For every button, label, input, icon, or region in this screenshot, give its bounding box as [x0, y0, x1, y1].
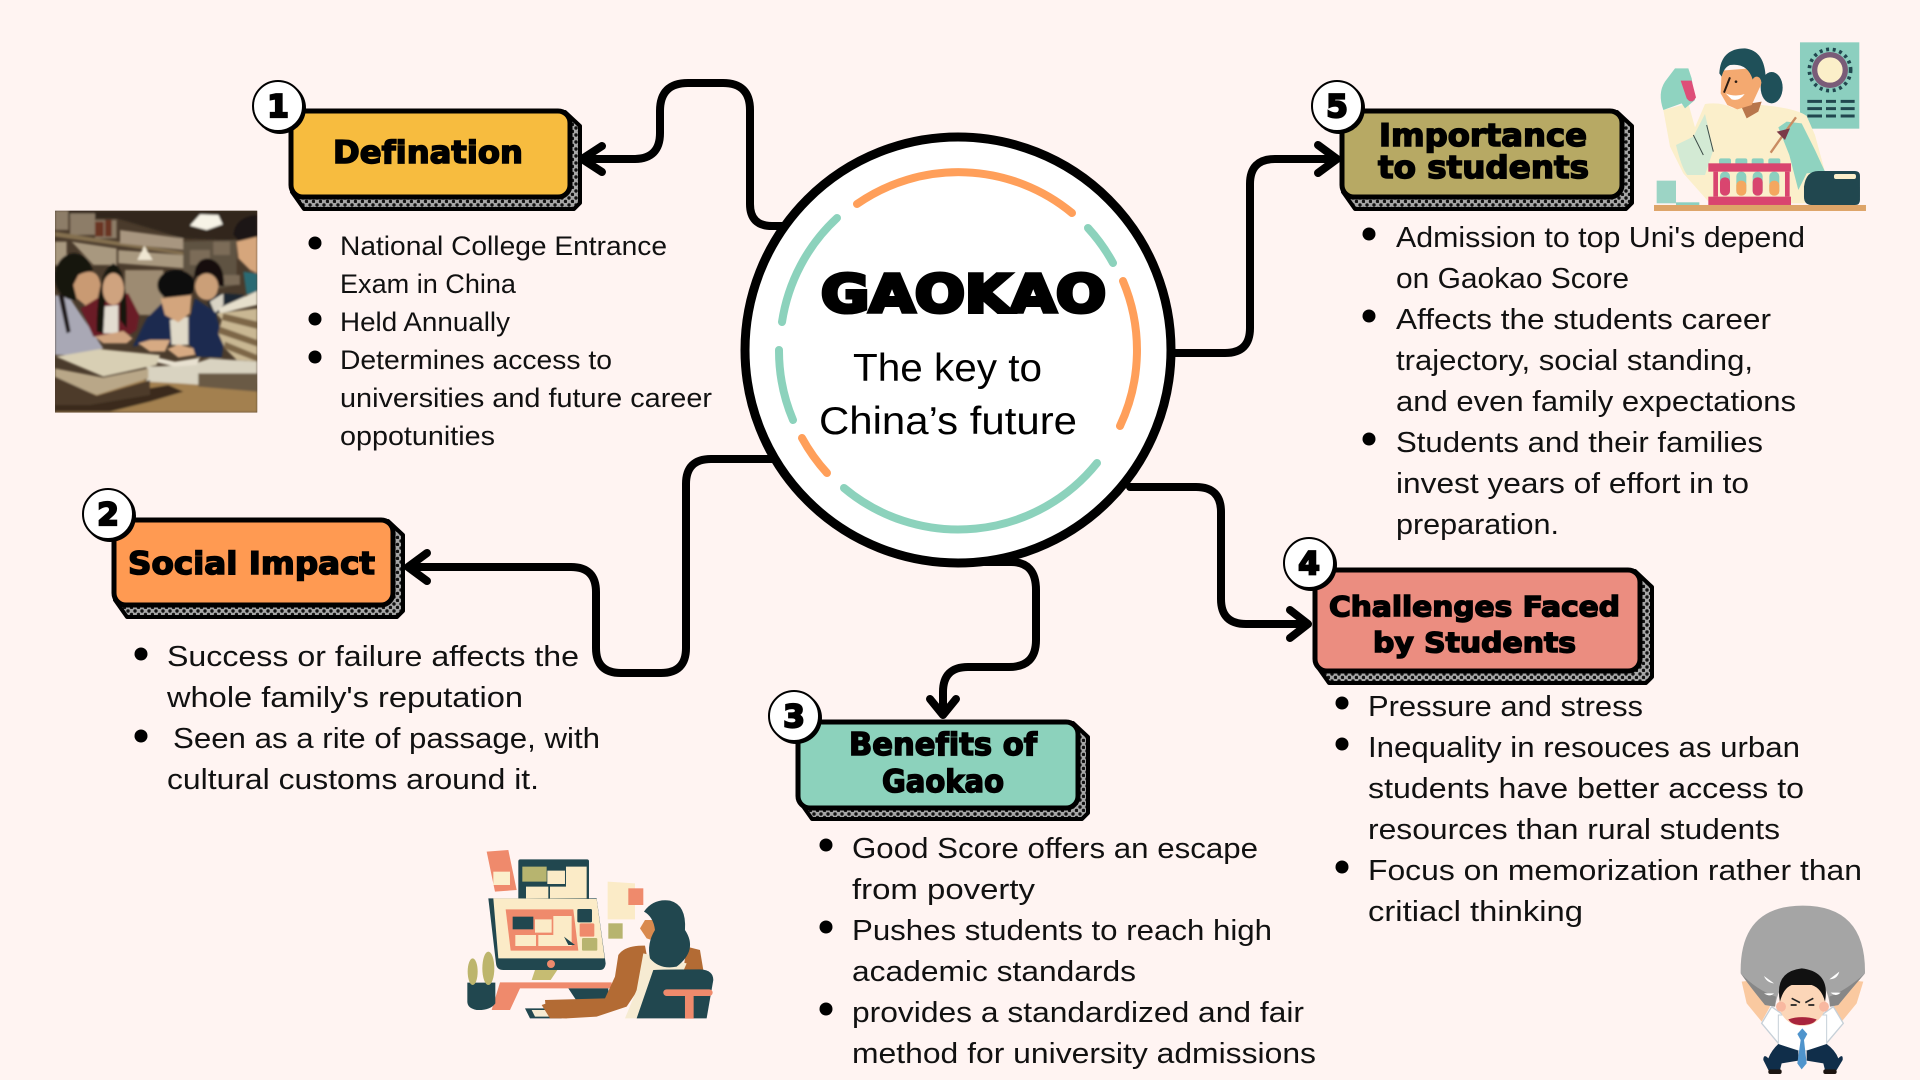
panel: Social Impact — [83, 489, 600, 796]
text: importance bullets — [1362, 222, 1805, 541]
text: challenges bullets: Inequality in resouces as urban — [1368, 732, 1800, 764]
panel: Benefits of Gaokao — [769, 691, 1316, 1070]
text: challenges bullets: students have better access to — [1368, 773, 1804, 805]
test tube rack — [1708, 158, 1791, 205]
connector: centre to Defination — [582, 83, 782, 226]
right student — [207, 293, 245, 317]
head — [1741, 102, 1762, 118]
icon: woman at computer — [467, 850, 713, 1019]
text: definition bullets: National College Entrance — [340, 231, 667, 261]
text: importance bullets: on Gaokao Score — [1396, 263, 1629, 295]
number badge 1: 1 — [267, 89, 289, 125]
text: importance bullets: invest years of effort in to — [1396, 468, 1749, 500]
text: importance bullets: preparation. — [1396, 509, 1559, 541]
lab table and objects — [1654, 205, 1866, 211]
text: importance bullets: Affects the students career — [1396, 304, 1771, 336]
heading box: Importance: Importance — [1379, 118, 1587, 154]
text: benefits bullets — [820, 833, 1316, 1070]
text: definition bullets: Held Annually — [340, 307, 511, 337]
text: challenges bullets — [1336, 691, 1862, 928]
number badge 2: 2 — [97, 497, 119, 533]
text: social impact bullets — [134, 641, 600, 796]
second student — [81, 293, 139, 337]
connector: centre to Benefits — [930, 562, 1036, 715]
number badge 2 — [83, 489, 136, 542]
panel: Importance to students — [1312, 81, 1805, 541]
decorative ring arcs — [779, 172, 1137, 530]
text: challenges bullets: Focus on memorization rather than — [1368, 855, 1862, 887]
number badge 5: 5 — [1326, 89, 1348, 125]
text: challenges bullets: critiacl thinking — [1368, 896, 1583, 928]
text: social impact bullets: cultural customs around it. — [167, 764, 539, 796]
heading box: Defination: Defination — [333, 135, 523, 171]
table and papers — [55, 380, 257, 413]
text: benefits bullets: academic standards — [852, 956, 1136, 988]
right glove and sleeve — [1778, 122, 1825, 190]
icon: scientist with test tubes — [1654, 42, 1866, 211]
connector: centre to Importance — [1172, 145, 1337, 353]
icon: man lifting a boulder — [1741, 906, 1865, 1074]
number badge 1 — [253, 81, 306, 134]
heading box: Importance: to students — [1378, 150, 1589, 186]
heading box: Challenges — [1315, 570, 1652, 683]
text: importance bullets: Students and their families — [1396, 427, 1763, 459]
number badge 4 — [1284, 538, 1337, 591]
panel: Challenges Faced by Students — [1284, 538, 1862, 928]
heading box: Importance — [1342, 111, 1632, 209]
text: challenges bullets: resources than rural students — [1368, 814, 1780, 846]
heading box: Benefits: Benefits of — [849, 727, 1037, 763]
left glove — [1661, 68, 1695, 110]
number badge 3: 3 — [783, 699, 805, 735]
text: social impact bullets: whole family's reputation — [166, 682, 523, 714]
title: GAOKAO — [821, 265, 1106, 325]
text: benefits bullets: method for university admissions — [852, 1038, 1316, 1070]
heading box: Defination — [291, 111, 580, 209]
subtitle — [819, 347, 1077, 443]
text: benefits bullets: Pushes students to reach high — [852, 915, 1272, 947]
text: challenges bullets: Pressure and stress — [1368, 691, 1643, 723]
heading box: Benefits — [798, 722, 1088, 819]
subtitle: China’s future — [819, 400, 1077, 443]
left student — [55, 295, 103, 355]
heading box: Benefits: Gaokao — [882, 764, 1004, 800]
text: benefits bullets: provides a standardized and fair — [852, 997, 1304, 1029]
torso — [1663, 103, 1825, 203]
central circle: GAOKAO — [745, 137, 1171, 563]
text: benefits bullets: Good Score offers an escape — [852, 833, 1258, 865]
text: social impact bullets: Success or failure affects the — [167, 641, 579, 673]
text: social impact bullets: Seen as a rite of passage, with — [173, 723, 600, 755]
upper right student — [243, 272, 257, 295]
image: students studying among books — [55, 211, 257, 413]
text: definition bullets — [308, 231, 712, 451]
text: importance bullets: Admission to top Uni's depend — [1396, 222, 1805, 254]
connector: centre to Challenges — [1130, 487, 1308, 638]
heading box: Challenges: Challenges Faced — [1329, 590, 1620, 623]
number badge 5 — [1312, 81, 1365, 134]
centre student — [133, 298, 224, 358]
text: benefits bullets: from poverty — [852, 874, 1036, 906]
number badge 3 — [769, 691, 822, 744]
panel: Defination — [253, 81, 712, 451]
heading box: Social Impact — [114, 520, 403, 617]
text: importance bullets: and even family expectations — [1396, 386, 1796, 418]
text: definition bullets: Exam in China — [340, 269, 517, 299]
heading box: Social Impact: Social Impact — [128, 546, 375, 582]
text: importance bullets: trajectory, social standing, — [1396, 345, 1753, 377]
text: definition bullets: Determines access to — [340, 345, 612, 375]
subtitle: The key to — [853, 347, 1042, 390]
text: definition bullets: oppotunities — [340, 421, 495, 451]
heading box: Challenges: by Students — [1373, 626, 1576, 659]
text: definition bullets: universities and future career — [340, 383, 712, 413]
connector: centre to Social Impact — [408, 459, 772, 673]
number badge 4: 4 — [1298, 546, 1320, 582]
